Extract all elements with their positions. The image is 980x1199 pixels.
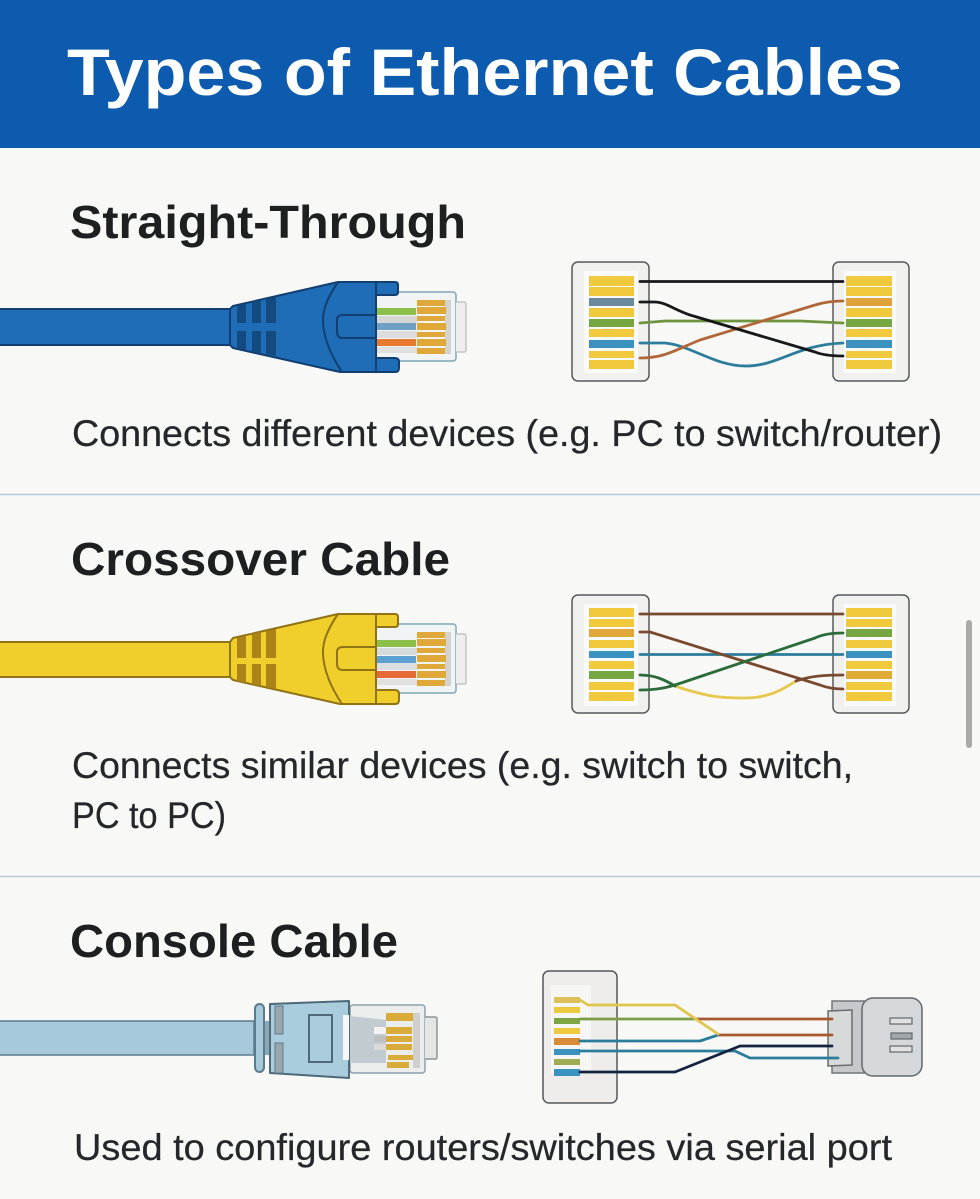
description: crossover: PC to PC) <box>72 795 226 836</box>
panel: straight-through <box>0 196 942 454</box>
icon: yellow RJ45 cable <box>0 614 466 704</box>
icon: blue RJ45 cable <box>0 282 466 372</box>
title: Types of Ethernet Cables <box>67 35 903 109</box>
wiring diagram: crossover <box>572 595 909 713</box>
wiring diagram: straight-through <box>572 262 909 381</box>
description: crossover: Connects similar devices (e.g. switch to switch, <box>72 745 853 786</box>
heading: console: Console Cable <box>70 915 398 967</box>
panel: crossover <box>0 533 909 836</box>
description: crossover <box>72 745 853 836</box>
heading: crossover: Crossover Cable <box>71 533 450 585</box>
heading: straight-through: Straight-Through <box>70 196 466 248</box>
icon: light blue console plug <box>0 1001 437 1078</box>
wiring diagram: console <box>543 971 922 1103</box>
description: straight-through: Connects different devices (e.g. PC to switch/router) <box>72 413 942 454</box>
title banner <box>0 0 980 148</box>
panel: console <box>0 915 922 1168</box>
description: console: Used to configure routers/switches via serial port <box>74 1127 893 1168</box>
